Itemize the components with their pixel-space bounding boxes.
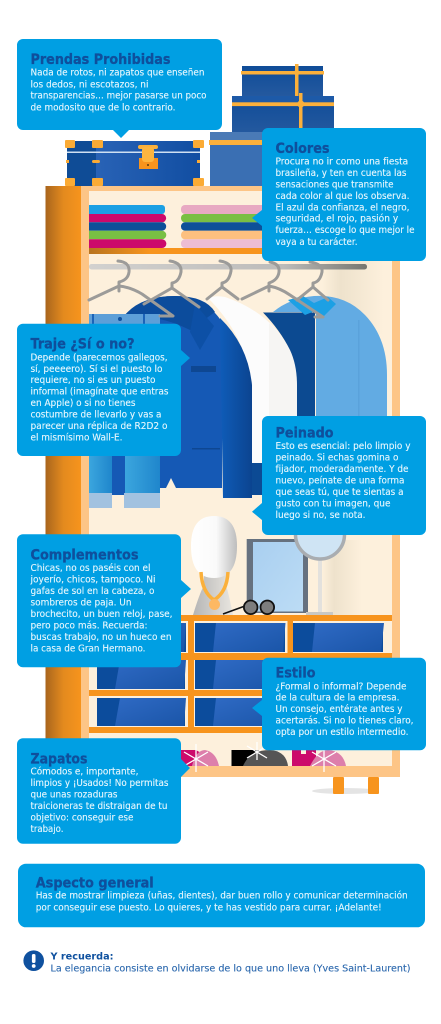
text block: El azul da confianza, el negro, [276, 202, 410, 213]
text block: el mismísimo Wall-E. [30, 432, 122, 444]
clothes rail [89, 264, 367, 270]
hanger 2 [144, 261, 199, 307]
framed mirror [247, 539, 308, 613]
text block: los dedos, ni escotazos, ni [30, 79, 148, 90]
panel: Zapatos [17, 738, 190, 844]
text block: sombreros de paja. Un [30, 598, 132, 608]
jacket sleeve front [220, 318, 252, 498]
wardrobe [46, 186, 400, 794]
text block: requiere, no si es un puesto [30, 375, 156, 386]
panel: Prendas Prohibidas [17, 39, 222, 138]
heading: Prendas Prohibidas [30, 52, 170, 68]
heading: Aspecto general [36, 875, 154, 891]
text block [276, 441, 411, 521]
text block: sí, peeeero). Sí si el puesto lo [30, 363, 163, 375]
text block: en Apple) o si no tienes [30, 398, 136, 409]
text block: limpios y ¡Usados! No permitas [30, 778, 168, 789]
trousers [89, 314, 160, 508]
panel: Peinado [252, 416, 426, 535]
text block [30, 68, 207, 113]
text block: cada color al que los observa. [276, 191, 410, 202]
text block: de modosito que de lo contrario. [30, 102, 176, 113]
boxes stacked on the wardrobe [65, 64, 334, 186]
panel: Complementos [17, 534, 191, 667]
text block: objetivo: conseguir ese [30, 812, 134, 824]
text block: por conseguir ese puesto. Lo quieres, y te has vestido para currar. ¡Adelante! [36, 902, 382, 913]
heading: Peinado [276, 425, 334, 441]
text block: ¿Formal o informal? Depende [276, 681, 407, 692]
text block: opta por un estilo intermedio. [276, 727, 408, 738]
mannequin with necklace [191, 516, 237, 615]
text block: costumbre de llevarlo y vas a [30, 410, 162, 420]
text block: brasileña, y ten en cuenta las [276, 168, 407, 179]
text block: Chicas, no os paséis con el [30, 562, 150, 574]
text block: brochecito, un buen reloj, pase, [30, 609, 172, 620]
text block [276, 681, 414, 738]
dark vest [263, 312, 315, 416]
wardrobe frame [46, 186, 400, 777]
text block: Nada de rotos, ni zapatos que enseñen [30, 68, 204, 79]
callout: Y recuerda [23, 950, 411, 975]
text block: Depende (parecemos gallegos, [30, 352, 168, 363]
round mirror [296, 510, 344, 615]
text block: traicioneras te distraigan de tu [30, 801, 168, 812]
text block [30, 352, 168, 444]
jacket [112, 296, 222, 495]
heading: Complementos [30, 547, 138, 563]
text block: Un consejo, entérate antes y [276, 703, 403, 715]
text block: sensaciones que transmite [276, 180, 394, 191]
text block: parecer una réplica de R2D2 o [30, 420, 168, 432]
panel: Aspecto general [18, 864, 425, 927]
text block: fuerza… escoge lo que mejor le [276, 225, 415, 236]
icon: exclamation mark [23, 950, 44, 971]
text block [36, 890, 408, 913]
text block: gusto con tu imagen, que [276, 498, 391, 509]
text block: que seas tú, que te sientas a [276, 486, 404, 498]
trunk [65, 140, 204, 186]
middle hat box [232, 93, 334, 133]
panel: Traje [17, 324, 190, 456]
text block [276, 157, 415, 248]
heading: Estilo [276, 666, 316, 682]
panel: Colores [252, 128, 426, 261]
text block: transparencias… mejor pasarse un poco [30, 91, 207, 102]
text block: pero poco más. Recuerda: [30, 619, 148, 631]
panel: Estilo [252, 658, 426, 750]
heading: Y recuerda: [49, 951, 114, 962]
text block: informal (imagínate que entras [30, 386, 168, 398]
text block [30, 562, 173, 654]
text block: buscas trabajo, no un hueco en [30, 632, 172, 643]
folded towels right [181, 205, 266, 248]
quote: La elegancia consiste en olvidarse de lo que uno lleva (Yves Saint-Laurent) [50, 964, 410, 975]
text block: nuevo, peínate de una forma [276, 474, 404, 486]
text block: Esto es esencial: pelo limpio y [276, 441, 411, 452]
heading: Zapatos [30, 751, 88, 767]
heading: Colores [276, 141, 330, 157]
hangers [89, 261, 328, 317]
hanger 5 [297, 262, 328, 300]
text block: trabajo. [30, 824, 64, 835]
text block: la casa de Gran Hermano. [30, 643, 146, 654]
text block: vaya a tu carácter. [276, 236, 358, 248]
text block: que unas rozaduras [30, 790, 118, 801]
text block: joyerío, chicos, tampoco. Ni [30, 574, 155, 586]
text block: luego si no, se nota. [276, 510, 366, 521]
hanger 3 [207, 261, 238, 299]
light blue shirt [273, 296, 387, 416]
lower box [209, 132, 321, 186]
text block: peinado. Si echas gomina o [276, 452, 399, 464]
hanger 1 [89, 261, 173, 316]
text block: Procura no ir como una fiesta [276, 157, 408, 168]
text block: de la cultura de la empresa. [276, 693, 400, 704]
text block [30, 766, 168, 835]
top hat box [241, 64, 324, 96]
text block: fijador, moderadamente. Y de [276, 464, 409, 475]
text block: gafas de sol en la cabeza, o [30, 586, 155, 597]
folded towels left [89, 205, 166, 248]
shoes [170, 742, 346, 772]
hanger 4 [242, 262, 323, 317]
text block: Has de mostrar limpieza (uñas, dientes), dar buen rollo y comunicar determinación [36, 890, 408, 902]
wardrobe legs [312, 777, 379, 794]
text block: Cómodos e, importante, [30, 766, 138, 778]
glasses [223, 600, 274, 614]
heading: Traje ¿Sí o no? [30, 337, 134, 353]
text block: acertarás. Si no lo tienes claro, [276, 715, 414, 727]
text block: seguridad, el rojo, pasión y [276, 213, 398, 225]
drawer unit [89, 615, 392, 733]
white shirt [208, 296, 297, 495]
